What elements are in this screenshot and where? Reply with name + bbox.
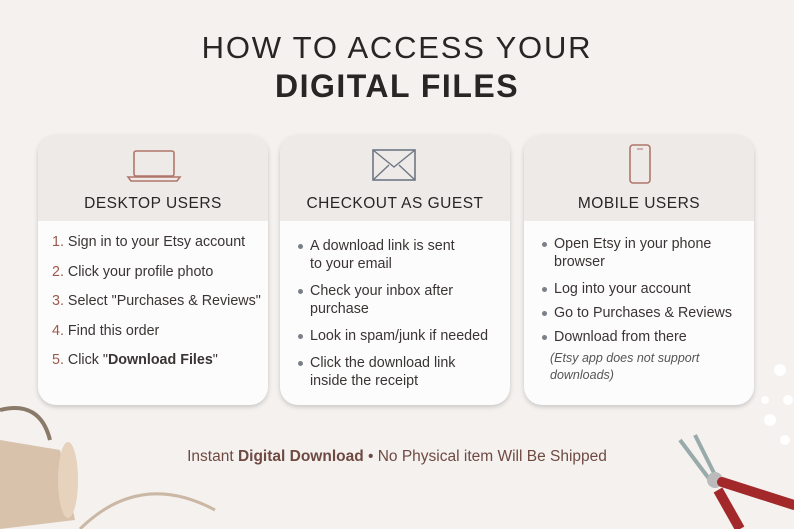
panel: desktop users bbox=[38, 135, 268, 405]
title: HOW TO ACCESS YOUR bbox=[202, 30, 592, 65]
bullets: Open Etsy in your phone bbox=[554, 236, 711, 252]
bullets: Check your inbox after bbox=[310, 283, 453, 299]
steps: 5. Click "Download Files" bbox=[52, 352, 218, 368]
bullets: Click the download link bbox=[310, 355, 455, 371]
bullets: Log into your account bbox=[554, 281, 691, 297]
bullets: to your email bbox=[310, 256, 392, 272]
bullets: (Etsy app does not support bbox=[550, 351, 699, 365]
decoration: pliers and flowers bbox=[678, 364, 794, 529]
bullets: purchase bbox=[310, 301, 369, 317]
title bbox=[202, 30, 592, 104]
decoration: thread spool bbox=[0, 406, 216, 529]
bullets: A download link is sent bbox=[310, 238, 455, 254]
steps: 1. Sign in to your Etsy account bbox=[52, 234, 245, 250]
steps: 4. Find this order bbox=[52, 322, 159, 338]
bullets: Download from there bbox=[554, 329, 687, 345]
bullets: Look in spam/junk if needed bbox=[310, 328, 488, 344]
title: DIGITAL FILES bbox=[275, 68, 519, 104]
icon: laptop bbox=[126, 150, 182, 182]
bullets: browser bbox=[554, 254, 605, 270]
steps bbox=[52, 234, 261, 368]
steps: 3. Select "Purchases & Reviews" bbox=[52, 293, 261, 309]
heading: DESKTOP USERS bbox=[84, 195, 222, 212]
bullets bbox=[542, 236, 732, 382]
bullets bbox=[298, 238, 488, 389]
panel: checkout as guest bbox=[280, 135, 510, 405]
heading: MOBILE USERS bbox=[578, 195, 700, 212]
icon: phone bbox=[629, 144, 651, 184]
heading: CHECKOUT AS GUEST bbox=[306, 195, 484, 212]
panel: mobile users bbox=[524, 135, 754, 405]
bullets: inside the receipt bbox=[310, 373, 418, 389]
footer text: Instant Digital Download • No Physical item Will Be Shipped bbox=[187, 448, 607, 465]
icon: envelope bbox=[372, 149, 416, 181]
steps: 2. Click your profile photo bbox=[52, 264, 213, 280]
bullets: Go to Purchases & Reviews bbox=[554, 305, 732, 321]
bullets: downloads) bbox=[550, 368, 614, 382]
